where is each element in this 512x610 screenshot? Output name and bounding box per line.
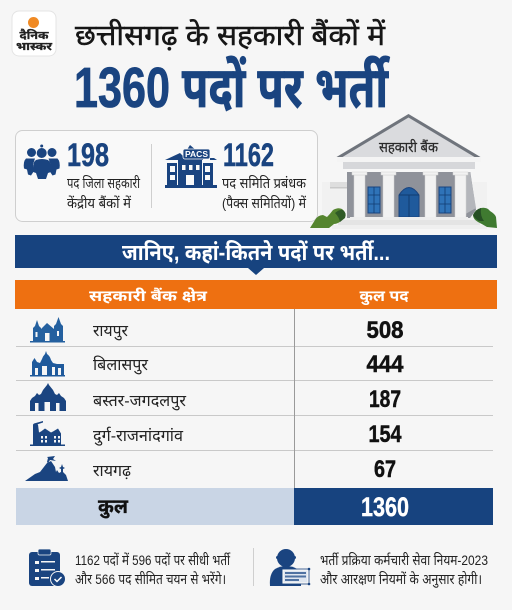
table header: सहकारी बैंक क्षेत्र: [89, 287, 208, 305]
icon: factory: [30, 421, 65, 446]
row: total: कुल: [98, 496, 129, 519]
logo: Dainik Bhaskar: दैनिक: [20, 29, 49, 42]
roof: [336, 114, 480, 157]
logo: Dainik Bhaskar: भास्कर: [16, 41, 53, 53]
row: Bastar-Jagdalpur: [30, 383, 401, 413]
title line 1: छत्तीसगढ़ के सहकारी बैंकों में: [75, 19, 386, 52]
label: bank name: सहकारी बैंक: [379, 139, 438, 155]
row: Raigarh: 67: [374, 456, 396, 483]
columns: [352, 172, 468, 218]
row: Raigarh: [25, 456, 396, 483]
stat: 198: 198: [67, 137, 109, 173]
row: Bilaspur: [30, 351, 404, 378]
row: Bilaspur: बिलासपुर: [93, 356, 148, 375]
text: 198 description line 2: केंद्रीय बैंकों में: [67, 195, 132, 211]
stat: 1162: 1162: [223, 137, 274, 173]
table header: कुल पद: [360, 288, 409, 306]
table header: [15, 280, 497, 309]
row: Raipur: रायपुर: [93, 323, 128, 341]
row: Bilaspur: 444: [366, 351, 404, 378]
icon: PACS building: PACS: [185, 150, 209, 159]
row: Raigarh: रायगढ़: [93, 463, 132, 480]
steps: [350, 217, 468, 220]
title line 2: 1360 पदों पर भर्ती: [74, 55, 390, 120]
windows and door: [368, 187, 451, 217]
row: Durg-Rajnandgaon: दुर्ग-राजनांदगांव: [93, 426, 184, 446]
icon: clipboard checklist: [29, 549, 66, 586]
row: total: 1360: [361, 492, 409, 522]
banner: heading: जानिए, कहां-कितने पदों पर भर्ती...: [122, 240, 390, 265]
row: Bastar-Jagdalpur: 187: [369, 386, 401, 413]
text: 1162 description line 2: (पैक्स समितियों) में: [222, 195, 307, 211]
note: left: [29, 549, 231, 587]
row: Raipur: [30, 317, 404, 344]
icon: worker with board: [270, 549, 310, 586]
row: total: [16, 488, 493, 525]
note: left: 1162 पदों में 596 पदों पर सीधी भर्ती: [75, 552, 231, 568]
illustration: bank building: [310, 114, 497, 229]
icon: Bilaspur monument: [30, 351, 65, 376]
row: Durg-Rajnandgaon: 154: [368, 421, 402, 448]
icon: Raipur monument: [30, 317, 65, 342]
text: 1162 description line 1: पद समिति प्रबंधक: [222, 175, 306, 191]
icon: people group: [24, 144, 60, 179]
note: right: [270, 549, 488, 589]
row: Durg-Rajnandgaon: [30, 421, 402, 448]
icon: Bastar temple: [30, 383, 66, 411]
row: Bastar-Jagdalpur: बस्तर-जगदलपुर: [93, 393, 186, 411]
icon: hill and temple: [25, 456, 68, 481]
panel: post breakdown: [16, 130, 318, 222]
note: right: और आरक्षण नियमों के अनुसार होगी।: [320, 570, 482, 589]
logo: Dainik Bhaskar: [12, 11, 56, 56]
bushes: [310, 208, 345, 228]
row: Raipur: 508: [366, 317, 404, 344]
note: right: भर्ती प्रक्रिया कर्मचारी सेवा नियम-2023: [320, 551, 488, 568]
icon: PACS building: [165, 145, 217, 188]
table: [15, 280, 497, 525]
note: left: और 566 पद सीमित चयन से भरेंगे।: [75, 570, 226, 587]
text: 198 description line 1: पद जिला सहकारी: [67, 175, 140, 191]
banner: heading: [15, 235, 497, 275]
